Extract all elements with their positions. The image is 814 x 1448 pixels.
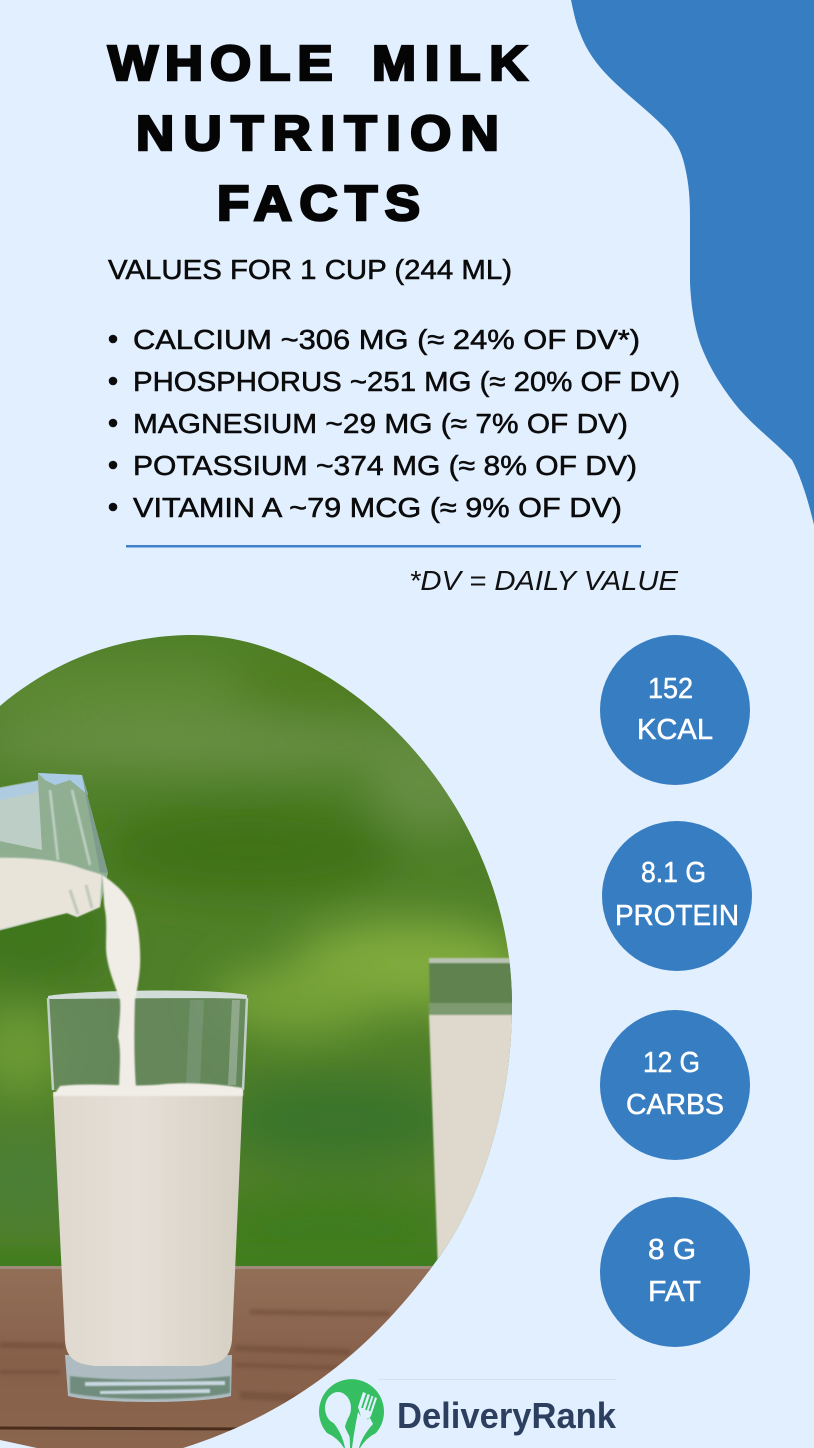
blurred green background (0, 630, 530, 1274)
stat circle: carbs (600, 1010, 750, 1160)
title (108, 36, 528, 231)
bottle (0, 773, 108, 932)
wordmark: DeliveryRank (397, 1395, 617, 1436)
micronutrient list: VITAMIN A ~79 MCG (≈ 9% OF DV) (133, 492, 622, 523)
main glass (48, 991, 247, 1402)
title: MILK (372, 36, 528, 91)
micronutrient list: CALCIUM ~306 MG (≈ 24% OF DV*) (133, 324, 640, 355)
milk stream (102, 875, 140, 1088)
stat circle: protein: PROTEIN (615, 900, 739, 932)
title: FACTS (217, 176, 420, 231)
DeliveryRank logo (319, 1379, 617, 1448)
stat circle: fat (600, 1197, 750, 1347)
stat circle: protein (602, 821, 752, 971)
micronutrient list: PHOSPHORUS ~251 MG (≈ 20% OF DV) (133, 366, 680, 397)
subtitle: serving size: VALUES FOR 1 CUP (244 ML) (108, 254, 512, 285)
background glass of milk (428, 957, 512, 1260)
micronutrient list (109, 324, 680, 523)
icon: spoon and fork (319, 1379, 384, 1448)
photo: milk poured into glass (0, 630, 530, 1448)
stat circle: protein: 8.1 G (641, 857, 706, 889)
title: NUTRITION (136, 106, 499, 161)
stat circle: calories: KCAL (637, 714, 713, 746)
micronutrient list: POTASSIUM ~374 MG (≈ 8% OF DV) (133, 450, 637, 481)
stat circle: calories (600, 635, 750, 785)
stat circle: carbs: CARBS (626, 1089, 724, 1121)
footnote: *DV = DAILY VALUE (409, 565, 678, 596)
stat circle: calories: 152 (648, 673, 693, 705)
micronutrient list: MAGNESIUM ~29 MG (≈ 7% OF DV) (133, 408, 628, 439)
stat circle: fat: 8 G (648, 1234, 696, 1266)
title: WHOLE (108, 36, 333, 91)
stat circle: fat: FAT (648, 1276, 701, 1308)
wooden table (0, 1266, 432, 1448)
decorative blue blob top right (571, 0, 814, 525)
stat circle: carbs: 12 G (643, 1047, 700, 1079)
